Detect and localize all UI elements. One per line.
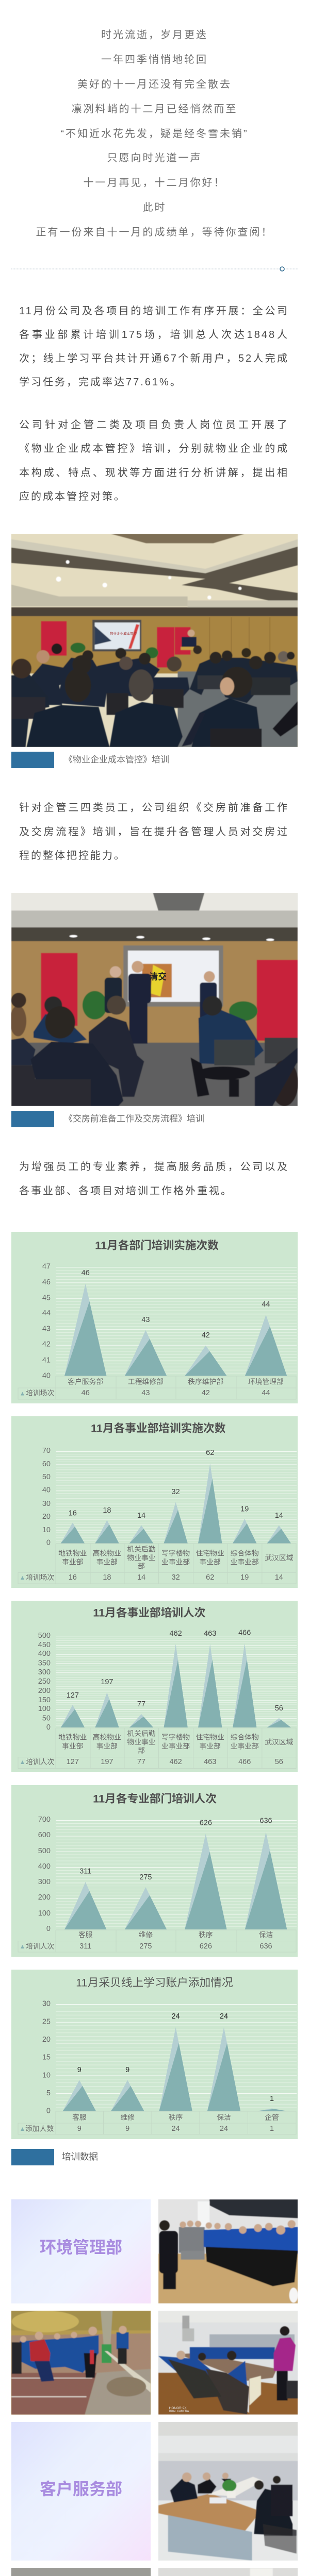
chart: sessions per business unit: 20 [42,1513,51,1521]
chart: trainees per specialty department: 636 [259,1942,272,1951]
chart: online learning accounts added: 0 [46,2107,51,2115]
chart: online learning accounts added: 11月采贝线上学习账户添加情况 [76,1976,233,1989]
chart: trainees per specialty department: 保洁 [259,1931,273,1939]
chart: trainees per business unit: 250 [38,1677,51,1686]
chart: sessions per department: 秩序维护部 [188,1378,223,1386]
chart: trainees per specialty department: 600 [38,1831,51,1839]
chart: online learning accounts added: 9 [77,2125,82,2133]
text: 十一月再见，十二月你好！ [84,177,226,189]
photo: customer service reading at red table [158,2568,298,2576]
chart: sessions per business unit: 0 [46,1538,51,1547]
chart: trainees per specialty department: 培训人次 [26,1942,54,1951]
chart: trainees per business unit: 350 [38,1659,51,1667]
caption text: cost control: 《物业企业成本管控》培训 [64,755,169,765]
chart: sessions per business unit: 事业部 [200,1558,221,1566]
photo: customer service classroom [158,2422,298,2561]
chart: trainees per specialty department: 100 [38,1909,51,1918]
chart: trainees per business unit [11,1601,298,1772]
chart: trainees per business unit: 77 [137,1700,145,1708]
chart: online learning accounts added: 20 [42,2036,51,2044]
intro poem [36,29,273,238]
chart: online learning accounts added: 秩序 [169,2113,183,2122]
chart: trainees per business unit: 400 [38,1650,51,1658]
chart: trainees per business unit: 127 [67,1691,79,1700]
photo: cost control training room [11,534,298,747]
chart: online learning accounts added: 9 [125,2066,129,2074]
chart: online learning accounts added: 24 [172,2012,180,2021]
chart: trainees per specialty department: 秩序 [199,1931,213,1939]
chart: sessions per business unit: 14 [275,1573,283,1582]
text: 本构成、特点、现状等方面进行分析讲解，提出相 [19,467,289,479]
chart: sessions per business unit: 18 [103,1573,111,1582]
chart: sessions per business unit: 14 [137,1573,145,1582]
chart: trainees per business unit: 127 [67,1758,79,1766]
chart: sessions per department: 40 [42,1372,51,1380]
chart: sessions per business unit: 地铁物业 [58,1550,87,1557]
chart: trainees per business unit: 200 [38,1687,51,1695]
chart: trainees per specialty department [11,1785,298,1957]
chart: trainees per specialty department: 626 [200,1942,212,1951]
text: 一年四季悄悄地轮回 [101,54,208,65]
chart: sessions per department: 45 [42,1294,51,1302]
photo: cleaning staff line-up [158,2199,298,2303]
chart: trainees per specialty department: 11月各专业部门培训人次 [93,1792,217,1805]
closing message [0,0,309,1]
closing slogan [0,0,309,1]
chart: online learning accounts added: 24 [220,2012,228,2021]
chart: trainees per business unit: 300 [38,1668,51,1676]
chart: sessions per department: 44 [262,1389,270,1397]
caption bar: handover [11,1111,54,1127]
chart: sessions per business unit: 16 [69,1510,77,1518]
chart: trainees per specialty department: 200 [38,1893,51,1902]
paragraph: departments value training [19,1161,289,1197]
chart: sessions per business unit: 14 [137,1512,145,1520]
chart: online learning accounts added: 24 [220,2125,228,2133]
chart: sessions per business unit [11,1416,298,1588]
future statement [0,0,309,1]
chart: online learning accounts added: 15 [42,2054,51,2062]
chart: trainees per business unit: 事业部 [200,1742,221,1750]
chart: sessions per business unit: 部 [138,1562,145,1570]
chart: trainees per business unit: 463 [204,1758,216,1766]
chart: sessions per department: 42 [202,1389,210,1397]
chart: sessions per department: 46 [82,1269,90,1277]
chart: trainees per business unit: 部 [138,1747,145,1755]
chart: trainees per business unit: 地铁物业 [58,1733,87,1741]
chart: trainees per business unit: 培训人次 [26,1758,54,1766]
chart: online learning accounts added: 保洁 [217,2113,231,2122]
text: 时光流逝，岁月更迭 [101,29,208,41]
chart: sessions per business unit: 住宅物业 [196,1550,224,1557]
text: 此时 [142,202,166,213]
chart: trainees per specialty department: 维修 [139,1931,153,1939]
chart: sessions per business unit: 32 [172,1488,180,1496]
chart: sessions per department: 43 [141,1316,150,1324]
chart: sessions per department: 46 [82,1389,90,1397]
photo: cleaning staff meeting [158,2311,298,2415]
paragraph: cost control training [19,419,289,502]
chart: trainees per business unit: 500 [38,1632,51,1640]
chart: sessions per department: 43 [42,1325,51,1333]
chart: trainees per business unit: 197 [101,1758,113,1766]
chart: sessions per business unit: 事业部 [62,1558,84,1566]
chart: sessions per department: 环境管理部 [248,1378,284,1386]
chart: sessions per department: 工程维修部 [128,1378,164,1386]
chart: sessions per business unit: 培训场次 [26,1573,54,1582]
chart: trainees per business unit: 462 [169,1630,182,1638]
chart: sessions per business unit: 70 [42,1447,51,1455]
text: 只愿向时光道一声 [107,152,202,164]
chart: trainees per business unit: 50 [42,1715,51,1723]
chart: sessions per business unit: 50 [42,1473,51,1481]
paragraph: training overview [19,305,289,388]
chart: sessions per business unit: 业事业部 [231,1558,259,1566]
chart: trainees per specialty department: 275 [139,1873,152,1882]
chart: trainees per business unit: 11月各事业部培训人次 [93,1606,206,1619]
chart: online learning accounts added: 30 [42,2000,51,2008]
chart: online learning accounts added: 1 [270,2095,274,2103]
chart: sessions per business unit: 10 [42,1526,51,1534]
chart: sessions per business unit: 62 [206,1449,214,1457]
text: 正有一份来自十一月的成绩单，等待你查阅！ [36,227,273,238]
chart: sessions per department: 44 [42,1309,51,1317]
chart: trainees per specialty department: 626 [200,1819,212,1827]
chart: trainees per business unit: 事业部 [62,1742,84,1750]
chart: online learning accounts added: 9 [125,2125,129,2133]
chart: online learning accounts added: 5 [46,2089,51,2097]
text: 凛冽料峭的十二月已经悄然而至 [71,104,237,115]
panel: environment management label [11,2199,151,2303]
text: 各事业部、各项目对培训工作格外重视。 [19,1185,233,1197]
text: 11月份公司及各项目的培训工作有序开展：全公司 [19,306,289,317]
chart: trainees per business unit: 450 [38,1641,51,1649]
chart: sessions per business unit: 40 [42,1486,51,1494]
text: 及交房流程》培训，旨在提升各管理人员对交房过 [19,826,289,838]
text: 程的整体把控能力。 [19,850,126,861]
chart: sessions per business unit: 物业事业 [127,1554,156,1562]
chart: online learning accounts added: 维修 [120,2113,135,2122]
chart: sessions per department: 11月各部门培训实施次数 [95,1239,219,1252]
chart: trainees per business unit: 100 [38,1705,51,1713]
chart: trainees per business unit: 56 [275,1758,283,1766]
chart: sessions per business unit: 11月各事业部培训实施次数 [91,1422,226,1434]
chart: trainees per specialty department: 500 [38,1847,51,1855]
paragraph: handover training [19,802,289,861]
chart: sessions per business unit: 62 [206,1573,214,1582]
chart: sessions per business unit: 60 [42,1460,51,1468]
caption bar: training data [11,2149,54,2165]
chart: sessions per business unit: 19 [240,1573,249,1582]
text: 次；线上学习平台共计开通67个新用户，52人完成 [19,353,289,364]
text: 公司针对企管二类及项目负责人岗位员工开展了 [19,419,289,431]
chart: sessions per department: 客户服务部 [68,1378,103,1386]
chart: sessions per business unit: 武汉区域 [265,1554,294,1562]
text: 为增强员工的专业素养，提高服务品质，公司以及 [19,1161,289,1173]
caption text: training data: 培训数据 [62,2151,98,2162]
chart: trainees per business unit: 武汉区域 [265,1738,294,1746]
chart: trainees per business unit: 56 [275,1704,283,1713]
chart: trainees per business unit: 业事业部 [161,1742,190,1750]
chart: trainees per business unit: 综合体物 [231,1733,259,1741]
chart: trainees per specialty department: 700 [38,1816,51,1824]
panel: customer service label: 客户服务部 [40,2480,122,2498]
chart: sessions per business unit: 14 [275,1512,283,1520]
text: 《物业企业成本管控》培训，分别就物业企业的成 [19,443,289,454]
chart: sessions per business unit: 业事业部 [161,1558,190,1566]
chart: trainees per specialty department: 300 [38,1878,51,1886]
dotted divider with ring marker [11,266,298,272]
chart: trainees per business unit: 462 [169,1758,182,1766]
chart: trainees per business unit: 事业部 [96,1742,118,1750]
chart: sessions per business unit: 高校物业 [93,1549,121,1557]
chart: trainees per business unit: 业事业部 [231,1742,259,1750]
chart: sessions per department [11,1232,298,1403]
text: 美好的十一月还没有完全散去 [77,79,232,90]
photo: customer service boardroom [11,2568,151,2576]
chart: sessions per business unit: 综合体物 [231,1550,259,1557]
chart: online learning accounts added: 25 [42,2018,51,2026]
chart: online learning accounts added: 9 [77,2066,82,2074]
chart: online learning accounts added: 24 [172,2125,180,2133]
photo: fire drill outdoors [11,2311,151,2415]
text: “不知近水花先发，疑是经冬雪未销” [60,128,249,140]
chart: trainees per business unit: 77 [137,1758,145,1766]
chart: sessions per business unit: 16 [69,1573,77,1582]
panel: environment management label: 环境管理部 [40,2238,122,2257]
chart: sessions per business unit: 19 [240,1505,249,1514]
text: 学习任务，完成率达77.61%。 [19,377,182,388]
photo: cleaning staff meeting: DUAL CAMERA [169,2410,189,2413]
chart: trainees per specialty department: 311 [79,1942,91,1951]
chart: sessions per department: 42 [202,1331,210,1340]
chart: sessions per business unit: 32 [172,1573,180,1582]
chart: online learning accounts added: 1 [270,2125,274,2133]
caption text: handover: 《交房前准备工作及交房流程》培训 [64,1114,204,1124]
chart: sessions per business unit: 30 [42,1500,51,1508]
chart: online learning accounts added: 10 [42,2071,51,2079]
chart: online learning accounts added: 添加人数 [25,2125,54,2133]
photo: handover training room [11,893,298,1106]
chart: trainees per business unit: 466 [238,1758,251,1766]
chart: trainees per specialty department: 客服 [78,1930,93,1939]
chart: trainees per specialty department: 0 [46,1925,51,1933]
chart: trainees per business unit: 463 [204,1630,216,1638]
text: 针对企管三四类员工，公司组织《交房前准备工作 [19,802,289,814]
chart: sessions per business unit: 18 [103,1506,111,1515]
chart: trainees per specialty department: 275 [139,1942,152,1951]
chart: trainees per business unit: 写字楼物 [161,1733,190,1741]
chart: sessions per department: 41 [42,1356,51,1364]
chart: sessions per department: 47 [42,1262,51,1270]
chart: trainees per business unit: 高校物业 [93,1733,121,1741]
photo: handover training room: 清交 [149,971,167,981]
chart: sessions per department: 43 [141,1389,150,1397]
chart: trainees per specialty department: 311 [79,1867,91,1875]
chart: trainees per business unit: 0 [46,1723,51,1732]
chart: online learning accounts added: 客服 [72,2113,87,2122]
chart: sessions per business unit: 机关后勤 [127,1546,156,1553]
chart: trainees per specialty department: 400 [38,1862,51,1871]
chart: trainees per business unit: 466 [238,1629,251,1637]
chart: online learning accounts added: 企管 [265,2113,279,2122]
text: 各事业部累计培训175场，培训总人次达1848人 [19,329,289,341]
caption bar: cost control [11,752,54,768]
text: 应的成本管控对策。 [19,491,126,502]
chart: sessions per department: 44 [262,1300,270,1309]
chart: sessions per business unit: 事业部 [96,1558,118,1566]
chart: trainees per business unit: 物业事业 [127,1738,156,1746]
photo: cleaning staff meeting: HONOR 9X [169,2406,187,2410]
photo: cost control training room: 物业企业成本管控 [110,631,137,636]
chart: sessions per department: 培训场次 [26,1389,54,1397]
chart: trainees per business unit: 150 [38,1696,51,1704]
chart: trainees per specialty department: 636 [259,1817,272,1825]
panel: customer service label [11,2422,151,2561]
chart: trainees per business unit: 机关后勤 [127,1730,156,1737]
chart: sessions per business unit: 写字楼物 [161,1550,190,1557]
chart: trainees per business unit: 197 [101,1678,113,1686]
chart: trainees per business unit: 住宅物业 [196,1733,224,1741]
chart: sessions per department: 46 [42,1278,51,1286]
chart: sessions per department: 42 [42,1341,51,1349]
chart: online learning accounts added [11,1970,298,2139]
